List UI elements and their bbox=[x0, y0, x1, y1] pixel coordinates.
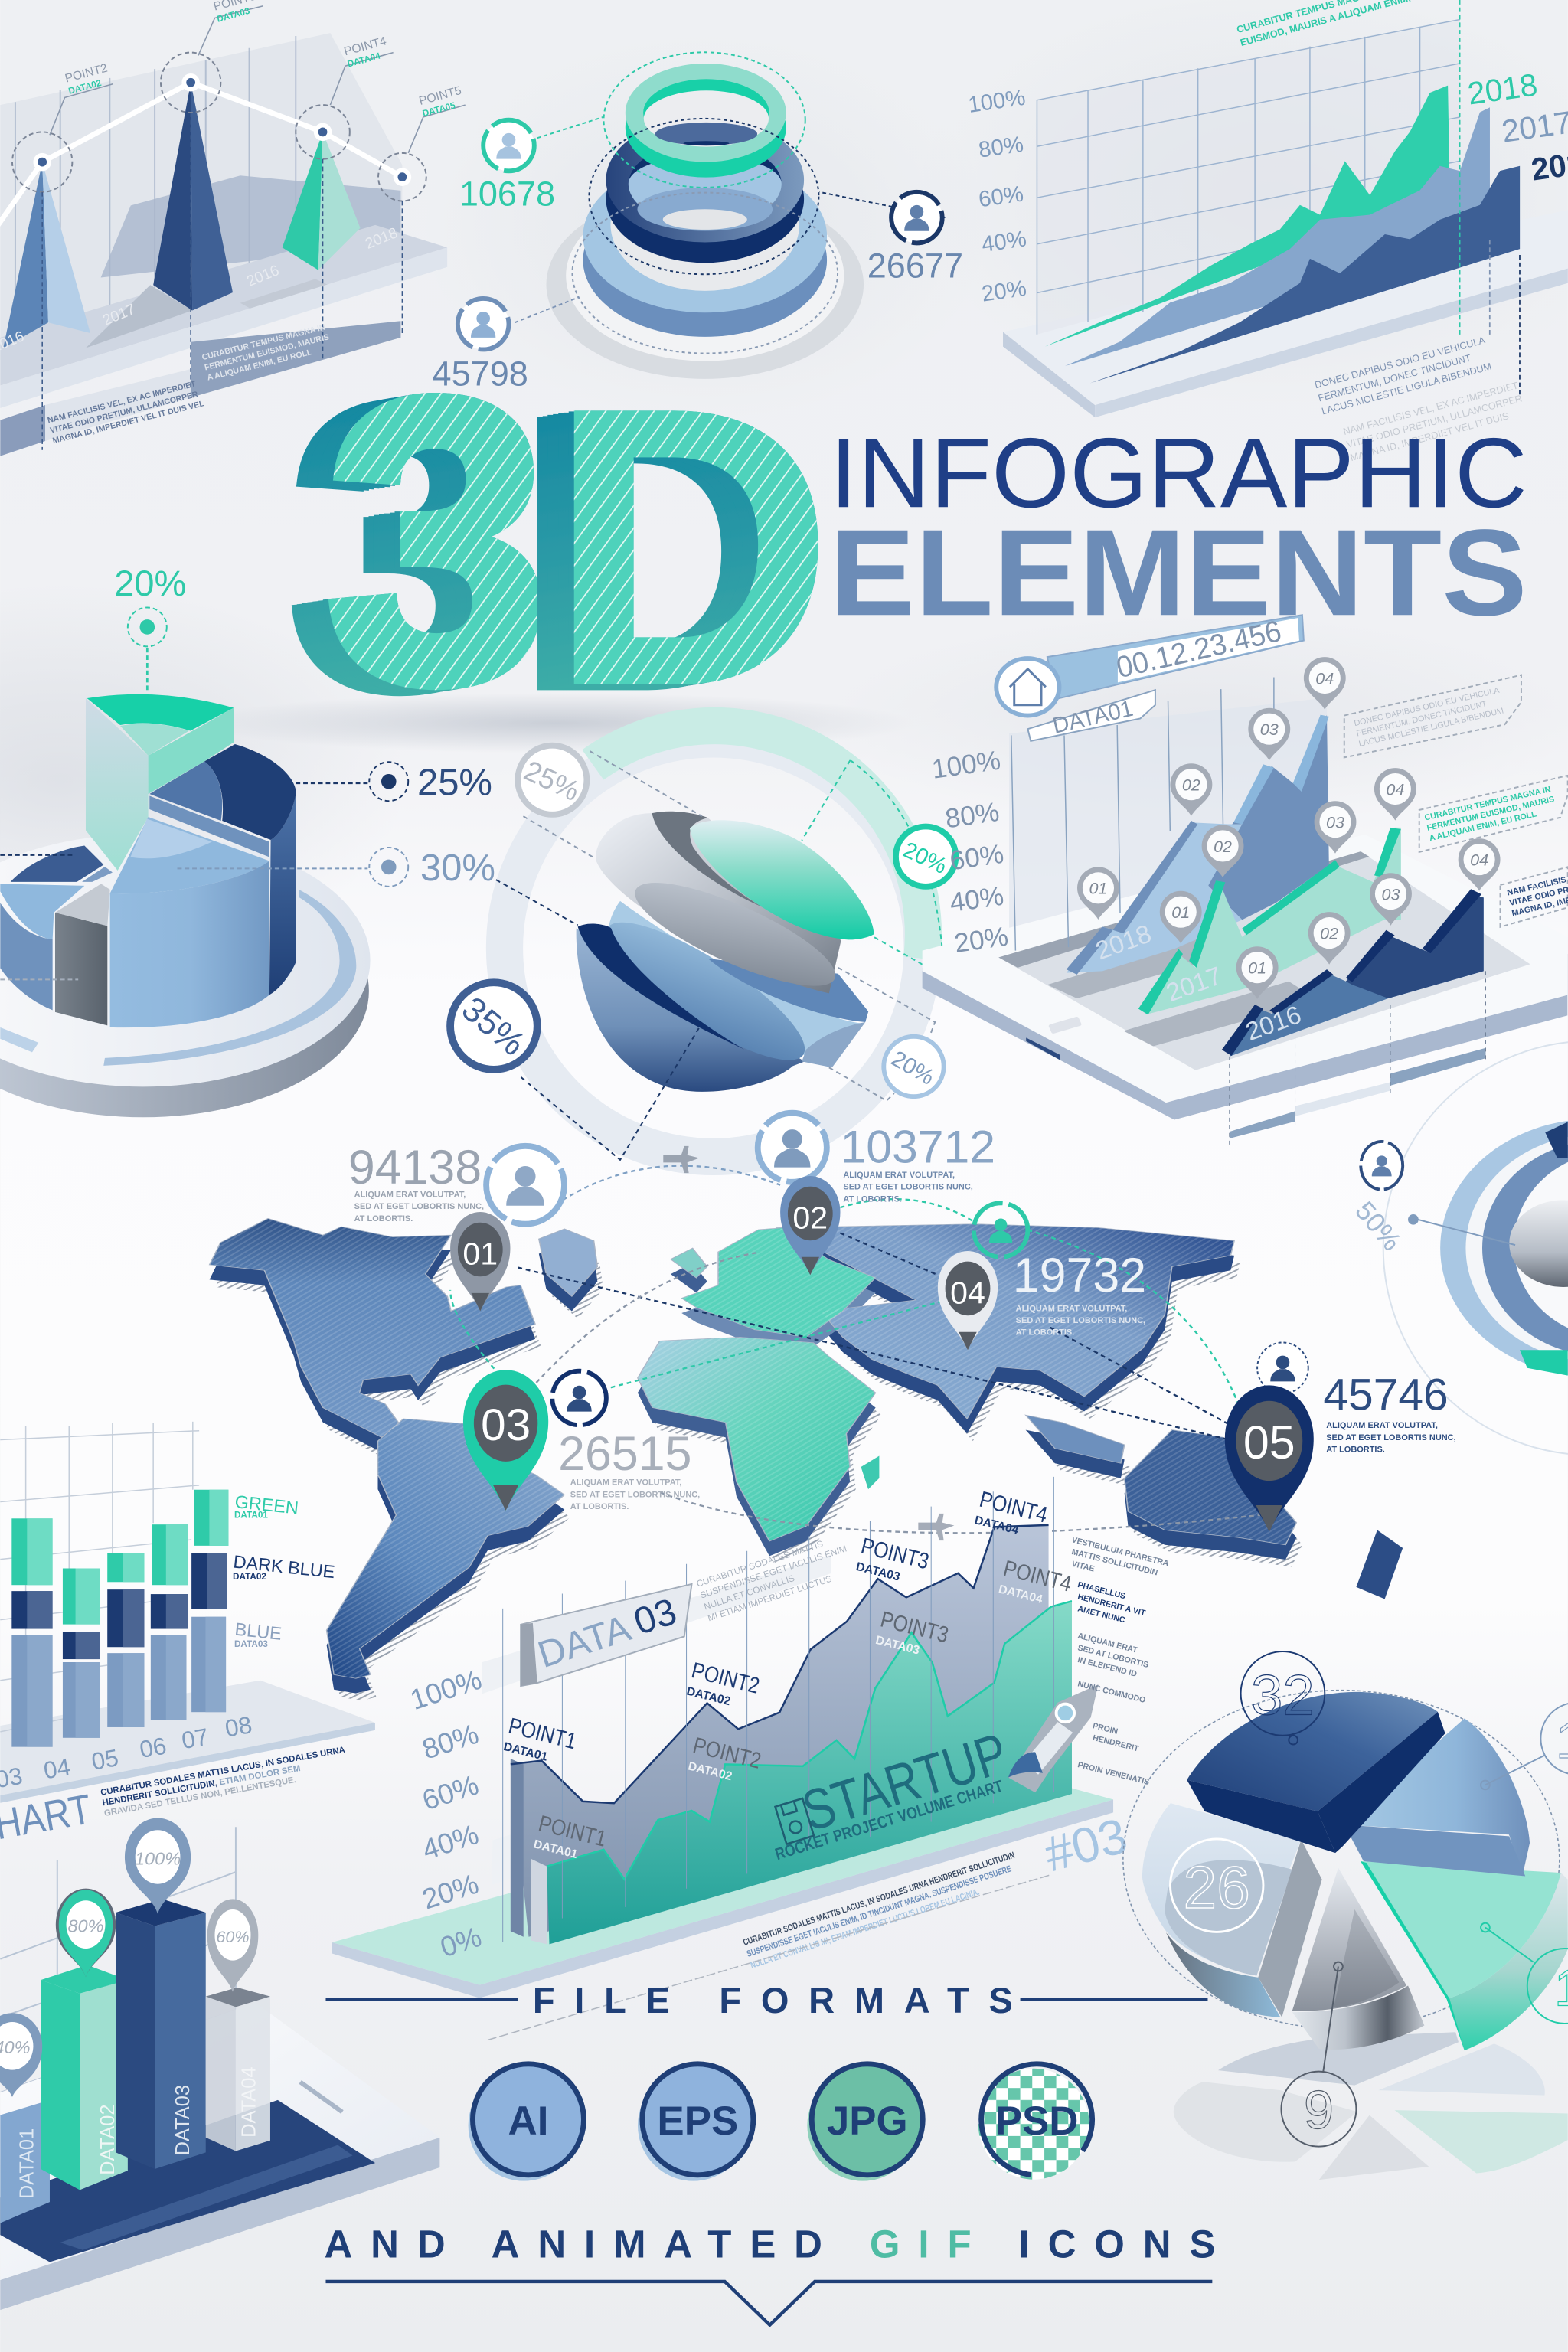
badge: blue 20%: 20% bbox=[887, 1046, 939, 1090]
axis labels: 40% bbox=[948, 881, 1005, 918]
segment: dark sliver bbox=[652, 812, 763, 907]
segment: blue disc bbox=[590, 901, 821, 1081]
badge: 9: 9 bbox=[1304, 2079, 1334, 2140]
caption grey: VITAE ODIO PRETIUM, ULLAMCORPER bbox=[1345, 392, 1524, 450]
icon: user teal bbox=[974, 1203, 1027, 1257]
side notes: ALIQUAM ERAT bbox=[1076, 1632, 1139, 1655]
note: teal: FERMENTUM EUISMOD, MAURIS bbox=[1426, 795, 1555, 833]
badge: PSD bbox=[972, 2055, 1101, 2184]
note: grey bbox=[1344, 675, 1521, 757]
series labels: grey: DATA01 bbox=[532, 1838, 579, 1861]
small text: A ALIQUAM ENIM, EU ROLL bbox=[206, 348, 313, 383]
badge: AI: AI bbox=[508, 2099, 548, 2144]
icon: floppy bbox=[776, 1798, 814, 1844]
small text: FERMENTUM EUISMOD, MAURIS bbox=[204, 332, 330, 372]
pins bbox=[1077, 657, 1501, 999]
small text: VITAE ODIO PRETIUM, ULLAMCORPER bbox=[49, 390, 199, 436]
stat: 19732 bbox=[1013, 1249, 1146, 1338]
map fine stripes bbox=[210, 1218, 1296, 1678]
badge: 35%: 35% bbox=[455, 989, 533, 1063]
side notes: AMET NUNC bbox=[1076, 1604, 1126, 1625]
pins: 04 bbox=[1470, 850, 1488, 869]
year labels: 2018 bbox=[1092, 920, 1155, 965]
note: teal: A ALIQUAM ENIM, EU ROLL bbox=[1429, 809, 1537, 843]
chart caption: CURABITUR SODALES MATTIS LACUS, IN SODALES URNA bbox=[100, 1746, 346, 1798]
badge: JPG: JPG bbox=[827, 2099, 908, 2144]
segment: glass bbox=[609, 901, 865, 1055]
side notes: PHASELLUS bbox=[1076, 1580, 1126, 1601]
series labels: navy bbox=[502, 1487, 1050, 1769]
percent axis: 60% bbox=[977, 181, 1025, 212]
chart title: STARTUP: STARTUP bbox=[795, 1721, 1014, 1843]
label: 25%: 25% bbox=[417, 762, 492, 803]
stat: 10678: 10678 bbox=[459, 174, 555, 213]
panel: bottom-right pie bbox=[1123, 1651, 1568, 2180]
segment: right lip bbox=[708, 959, 868, 1067]
year labels: 2017 bbox=[100, 301, 138, 329]
series 2017 bbox=[1138, 828, 1401, 1014]
icon: plane 1 bbox=[663, 1146, 699, 1173]
slice: light blue bbox=[1344, 1719, 1530, 1876]
new zealand bbox=[1356, 1530, 1403, 1599]
badge: 9 bbox=[1281, 1962, 1356, 2147]
stat: 45746: SED AT EGET LOBORTIS NUNC, bbox=[1326, 1433, 1456, 1442]
slice: teal bbox=[1361, 1861, 1568, 2050]
tag: DATA 03: 03 bbox=[629, 1591, 681, 1643]
panel: world map bbox=[210, 1113, 1456, 1700]
bar: DATA04 bbox=[206, 1988, 270, 2151]
note: navy: VITAE ODIO PR bbox=[1508, 885, 1568, 908]
panel: tablet chart bbox=[923, 615, 1568, 1148]
note text: MI ETIAM IMPERDIET LUCTUS bbox=[707, 1574, 833, 1623]
caption blue: FERMENTUM, DONEC TINCIDUNT bbox=[1317, 351, 1472, 403]
side notes: HENDRERIT A VIT bbox=[1076, 1592, 1147, 1618]
panel: top-left cone chart bbox=[0, 0, 466, 456]
series labels: navy: DATA03 bbox=[854, 1560, 902, 1584]
panel: stacked rings bbox=[433, 52, 963, 394]
series labels: grey bbox=[532, 1556, 1074, 1867]
caption: SUSPENDISSE EGET IACULIS ENIM, ID TINCIDUNT MAGNA. SUSPENDISSE POSUERE bbox=[746, 1864, 1013, 1959]
panel: sphere chart bbox=[450, 726, 956, 1160]
percent axis bbox=[966, 85, 1028, 307]
title: 3D bbox=[325, 317, 833, 766]
stat: 94138 bbox=[348, 1141, 564, 1224]
series labels: navy: POINT1 bbox=[506, 1713, 579, 1754]
pin 05 bbox=[1225, 1385, 1314, 1532]
axis labels: 80% bbox=[418, 1717, 482, 1766]
panel: right donut bbox=[1349, 1041, 1568, 1455]
caption: NULLA ET CONVALLIS MI, ETIAM IMPERDIET LUCTUS LOREM EU LACINIA. bbox=[750, 1886, 981, 1971]
segment: teal cap bbox=[690, 820, 874, 939]
year labels: 2018 bbox=[363, 224, 400, 253]
badge: right upper bbox=[1481, 1703, 1568, 1789]
label: 20%: 20% bbox=[114, 563, 186, 603]
callout rule bbox=[325, 2282, 1212, 2325]
badge: PSD: PSD bbox=[995, 2099, 1078, 2144]
stat: 94138: AT LOBORTIS. bbox=[354, 1214, 413, 1223]
note: teal: CURABITUR TEMPUS MAGNA IN bbox=[1424, 785, 1552, 823]
legend: BLUE bbox=[234, 1619, 283, 1644]
header pill bbox=[1047, 615, 1304, 699]
stat: 103712 bbox=[758, 1113, 995, 1204]
stat: 19732: 19732 bbox=[1013, 1249, 1146, 1302]
bar: DATA04: DATA04 bbox=[238, 2066, 260, 2138]
pins: 01 bbox=[1171, 903, 1190, 922]
axis labels: 40% bbox=[418, 1818, 482, 1866]
side notes: VESTIBULUM PHARETRA bbox=[1070, 1535, 1170, 1569]
pins: 02 bbox=[1182, 775, 1200, 794]
bar: DATA01: DATA01 bbox=[16, 2128, 38, 2199]
badge: 25%: 25% bbox=[519, 754, 585, 807]
point labels: DATA04 bbox=[346, 51, 382, 70]
series labels: grey: DATA04 bbox=[997, 1583, 1044, 1606]
side notes bbox=[1070, 1535, 1170, 1787]
axis labels bbox=[930, 746, 1010, 959]
bar: DATA02 bbox=[41, 1965, 128, 2190]
small text bbox=[47, 322, 332, 446]
badge: 26 bbox=[1170, 1839, 1263, 1932]
pin 03: 03 bbox=[481, 1400, 531, 1450]
chart number: #03 bbox=[1038, 1807, 1133, 1883]
pin: 100% bbox=[125, 1818, 191, 1914]
series labels: grey: DATA02 bbox=[687, 1760, 733, 1783]
pins: 04 bbox=[1386, 779, 1404, 799]
stat: 19732: AT LOBORTIS. bbox=[1016, 1328, 1074, 1338]
shadow under title bbox=[195, 693, 915, 753]
side notes: MATTIS SOLLICITUDIN bbox=[1070, 1547, 1158, 1578]
pin 01: 01 bbox=[462, 1236, 498, 1272]
tag DATA01: DATA01 bbox=[1050, 696, 1135, 739]
segment: grey band bbox=[596, 813, 841, 993]
badge: EPS bbox=[638, 2064, 753, 2181]
axis labels: 0% bbox=[436, 1920, 485, 1963]
side notes: IN ELEIFEND ID bbox=[1076, 1655, 1138, 1679]
axis numbers: 06 bbox=[138, 1733, 168, 1763]
stat: 45798 bbox=[433, 299, 528, 394]
axis numbers: 05 bbox=[90, 1744, 120, 1775]
series 2018 bbox=[1067, 715, 1329, 975]
legend: DATA02 bbox=[233, 1572, 266, 1582]
slice: grey bbox=[1292, 1868, 1424, 2050]
bar: DATA01 bbox=[0, 2100, 50, 2223]
year labels bbox=[1465, 60, 1568, 194]
axis labels: 60% bbox=[418, 1768, 482, 1816]
pin: 80%: 80% bbox=[67, 1916, 104, 1936]
axis labels: 100% bbox=[407, 1663, 485, 1716]
stat: 45798: 45798 bbox=[433, 354, 528, 394]
phone body bbox=[0, 2003, 439, 2310]
stat: 103712: 103712 bbox=[840, 1120, 995, 1172]
header pill: 00.12.23.456 bbox=[1113, 615, 1285, 684]
side notes: SED AT LOBORTIS bbox=[1076, 1643, 1149, 1670]
pins: 02 bbox=[1320, 923, 1338, 942]
bar: DATA03: DATA03 bbox=[172, 2085, 194, 2155]
ring: navy bbox=[606, 117, 804, 263]
slice: left blue bbox=[0, 845, 113, 1010]
label: 30% bbox=[369, 848, 495, 889]
series labels: navy: DATA01 bbox=[502, 1740, 549, 1764]
slice: pale bbox=[1142, 1803, 1322, 2017]
legend bbox=[232, 1491, 336, 1649]
caption grey: NAM FACILISIS VEL, EX AC IMPERDIET bbox=[1342, 379, 1520, 437]
tag DATA01 bbox=[1027, 690, 1155, 741]
legend: DATA03 bbox=[234, 1639, 268, 1649]
stat: 26515: ALIQUAM ERAT VOLUTPAT, bbox=[570, 1478, 681, 1488]
chart caption: HENDRERIT SOLLICITUDIN, ETIAM DOLOR SEM bbox=[102, 1764, 301, 1808]
caption grey: MAGNA ID, IMPERDIET VEL IT DUIS bbox=[1349, 410, 1510, 463]
small text: NAM FACILISIS VEL, EX AC IMPERDIET bbox=[47, 379, 198, 425]
icon: plane 2 bbox=[918, 1514, 954, 1540]
madagascar bbox=[861, 1456, 879, 1489]
stat: 45746 bbox=[1257, 1342, 1456, 1454]
icon: rocket bbox=[1008, 1684, 1098, 1792]
axis numbers bbox=[0, 1711, 254, 1793]
pin: 40% bbox=[0, 2013, 42, 2097]
pin: 80% bbox=[56, 1889, 116, 1977]
year labels bbox=[1092, 920, 1305, 1047]
segment: navy rim bbox=[578, 924, 744, 1050]
badge: AI bbox=[469, 2064, 583, 2181]
tag: DATA 03: DATA bbox=[533, 1608, 636, 1676]
point labels: DATA02 bbox=[67, 78, 103, 96]
map sides bbox=[210, 1233, 1296, 1694]
icon: house bbox=[996, 658, 1060, 716]
3 face: 3 bbox=[325, 317, 549, 766]
stat: 19732: SED AT EGET LOBORTIS NUNC, bbox=[1016, 1316, 1145, 1325]
series labels: navy: DATA02 bbox=[685, 1685, 732, 1708]
pins: 01 bbox=[1248, 959, 1266, 978]
year labels: 2016 bbox=[1242, 1001, 1305, 1047]
stat: 94138: SED AT EGET LOBORTIS NUNC, bbox=[354, 1202, 484, 1211]
axis labels: 20% bbox=[418, 1867, 482, 1916]
axis labels: 80% bbox=[943, 797, 1001, 834]
panel: phone bar chart bbox=[0, 1818, 439, 2310]
panel: left pie chart bbox=[0, 563, 495, 1117]
legend: DARK BLUE bbox=[232, 1551, 336, 1582]
title: INFOGRAPHIC: INFOGRAPHIC bbox=[830, 418, 1527, 528]
stat: 45746: AT LOBORTIS. bbox=[1326, 1445, 1385, 1454]
pin 04 bbox=[938, 1251, 998, 1350]
chart caption: GRAVIDA SED TELLUS NON, PELLENTESQUE. bbox=[103, 1775, 297, 1818]
title: ELEMENTS: ELEMENTS bbox=[830, 505, 1527, 642]
badge: teal 20%: 20% bbox=[900, 837, 951, 879]
note: teal bbox=[1419, 776, 1568, 852]
stat: 94138: ALIQUAM ERAT VOLUTPAT, bbox=[354, 1190, 466, 1199]
note text: SUSPENDISSE EGET IACULIS ENIM bbox=[699, 1544, 848, 1601]
point labels: DATA03 bbox=[216, 6, 251, 24]
pins: 04 bbox=[1315, 668, 1334, 688]
slice: navy bbox=[149, 744, 296, 995]
caption: CURABITUR SODALES MATTIS LACUS, IN SODALES URNA HENDRERIT SOLLICITUDIN bbox=[742, 1851, 1016, 1948]
cone: navy bbox=[153, 83, 233, 311]
side notes: VITAE bbox=[1070, 1560, 1096, 1574]
stat: 103712: SED AT EGET LOBORTIS NUNC, bbox=[843, 1183, 973, 1192]
series labels: grey: POINT1 bbox=[536, 1811, 609, 1852]
caption blue: LACUS MOLESTIE LIGULA BIBENDUM bbox=[1321, 361, 1493, 416]
point labels: POINT2 bbox=[64, 62, 109, 86]
series labels: grey: POINT2 bbox=[691, 1733, 763, 1774]
percent axis: 20% bbox=[980, 276, 1028, 307]
badge: right lower bbox=[1481, 1923, 1568, 2024]
legend: DATA01 bbox=[234, 1511, 268, 1521]
axis numbers: 07 bbox=[179, 1723, 211, 1754]
side notes: PROIN bbox=[1092, 1721, 1119, 1736]
stat: 45746: ALIQUAM ERAT VOLUTPAT, bbox=[1326, 1421, 1438, 1430]
axis labels: 100% bbox=[930, 746, 1002, 785]
axis labels bbox=[407, 1663, 485, 1963]
note: grey: FERMENTUM, DONEC TINCIDUNT bbox=[1356, 700, 1488, 739]
year labels: 2017 bbox=[1163, 962, 1226, 1008]
stat: 26515: AT LOBORTIS. bbox=[570, 1502, 629, 1511]
badge: JPG bbox=[807, 2064, 923, 2181]
percent axis: 100% bbox=[966, 85, 1027, 118]
small text: MAGNA ID, IMPERDIET VEL IT DUIS VEL bbox=[51, 399, 206, 446]
note text: CURABITUR SODALES MATTIS bbox=[695, 1539, 825, 1589]
side notes: PROIN VENENATIS bbox=[1076, 1760, 1150, 1787]
series labels: navy: POINT3 bbox=[858, 1534, 932, 1574]
series labels: grey: DATA03 bbox=[874, 1634, 921, 1658]
stat: 26515 bbox=[552, 1371, 700, 1511]
percent axis: 80% bbox=[977, 132, 1025, 163]
note: navy: NAM FACILISIS bbox=[1506, 875, 1567, 898]
pin: 60% bbox=[207, 1899, 258, 1992]
stat: 94138: 94138 bbox=[348, 1141, 482, 1194]
sphere connectors bbox=[496, 751, 944, 1160]
slice: teal bbox=[86, 694, 234, 871]
small text: CURABITUR TEMPUS MAGNA IN bbox=[201, 322, 326, 362]
pin 03 bbox=[463, 1370, 548, 1511]
pin 05: 05 bbox=[1243, 1416, 1295, 1468]
axis numbers: 04 bbox=[41, 1753, 73, 1784]
point labels: POINT5 bbox=[418, 84, 463, 108]
pins: 03 bbox=[1260, 720, 1279, 739]
connector lines bbox=[450, 1166, 1260, 1533]
soft background shading bbox=[0, 0, 1568, 975]
label: 20% bbox=[114, 563, 186, 646]
side notes: NUNC COMMODO bbox=[1076, 1679, 1146, 1705]
stat: 26677: 26677 bbox=[867, 246, 963, 285]
badge: blue 20% bbox=[884, 1037, 944, 1096]
pin: 60%: 60% bbox=[216, 1927, 250, 1946]
stat: 103712: AT LOBORTIS. bbox=[843, 1194, 902, 1204]
bar: DATA02: DATA02 bbox=[97, 2104, 119, 2175]
series labels: navy: DATA04 bbox=[973, 1514, 1020, 1537]
side notes: HENDRERIT bbox=[1092, 1733, 1140, 1754]
cone: blue bbox=[3, 162, 90, 348]
slice: navy bbox=[1187, 1692, 1446, 1853]
note: grey: LACUS MOLESTIE LIGULA BIBENDUM bbox=[1358, 707, 1504, 749]
axis numbers: 08 bbox=[223, 1711, 254, 1743]
slice: grey bbox=[55, 884, 110, 1025]
heading: FILE FORMATS: FILE FORMATS bbox=[533, 1980, 1013, 2020]
badge: teal 20% bbox=[896, 827, 956, 887]
series labels: navy: POINT4 bbox=[977, 1487, 1050, 1528]
caption blue bbox=[1313, 334, 1494, 416]
note: grey: DONEC DAPIBUS ODIO EU VEHICULA bbox=[1353, 686, 1501, 728]
pin 01 bbox=[450, 1212, 510, 1311]
badge: 32: 32 bbox=[1251, 1663, 1315, 1726]
stat: 26677 bbox=[867, 192, 963, 285]
label: 25% bbox=[369, 762, 492, 803]
note: navy bbox=[1501, 867, 1568, 927]
badge: EPS: EPS bbox=[657, 2099, 738, 2144]
note text: NULLA ET CONVALLIS bbox=[703, 1573, 796, 1612]
ring: teal bbox=[626, 64, 786, 178]
pin 04: 04 bbox=[950, 1276, 985, 1311]
pin 02: 02 bbox=[792, 1200, 828, 1236]
badge: 26: 26 bbox=[1184, 1854, 1250, 1921]
map hatching bbox=[215, 1240, 1302, 1700]
tag: DATA 03 bbox=[521, 1584, 692, 1686]
year labels bbox=[0, 224, 400, 356]
segment: bowl bbox=[577, 928, 805, 1092]
series labels: navy: POINT2 bbox=[689, 1658, 762, 1699]
chart subtitle: ROCKET PROJECT VOLUME CHART bbox=[773, 1776, 1005, 1864]
caption grey bbox=[1342, 379, 1527, 463]
map surface bbox=[210, 1218, 1296, 1678]
axis labels: 20% bbox=[952, 922, 1010, 959]
pins: 03 bbox=[1382, 885, 1400, 904]
year labels: 2018 bbox=[1465, 67, 1540, 112]
pins: 03 bbox=[1326, 812, 1344, 831]
D face: D bbox=[549, 326, 833, 766]
pins: 02 bbox=[1214, 837, 1232, 856]
panel: stacked bar chart bbox=[0, 1422, 375, 1853]
legend: GREEN bbox=[234, 1491, 299, 1518]
point labels: POINT4 bbox=[343, 34, 388, 58]
stat: 26515: 26515 bbox=[558, 1427, 691, 1481]
series labels: grey: POINT3 bbox=[878, 1607, 951, 1648]
label: 50%: 50% bbox=[1349, 1196, 1406, 1256]
caption blue: DONEC DAPIBUS ODIO EU VEHICULA bbox=[1313, 334, 1487, 390]
pin 02 bbox=[780, 1176, 840, 1275]
axis labels: 60% bbox=[948, 839, 1005, 876]
series labels: grey: POINT4 bbox=[1001, 1556, 1074, 1597]
pin: 100%: 100% bbox=[135, 1848, 181, 1868]
label: 30%: 30% bbox=[420, 848, 495, 889]
note text bbox=[695, 1532, 855, 1623]
stat: 45746: 45746 bbox=[1323, 1370, 1449, 1420]
heading: AND ANIMATED GIF ICONS: AND ANIMATED GIF ICONS bbox=[325, 2223, 1233, 2266]
pins: 01 bbox=[1089, 879, 1107, 898]
bars bbox=[11, 1490, 228, 1747]
icon: user bbox=[1361, 1142, 1403, 1190]
badge: 32 bbox=[1241, 1651, 1325, 1745]
point labels bbox=[64, 0, 466, 119]
3 extrude: 3 bbox=[325, 317, 549, 766]
series 2016 bbox=[1222, 889, 1484, 1057]
D extrude: D bbox=[549, 326, 833, 766]
panel: startup chart bbox=[332, 1477, 1170, 2040]
year labels: 2016 bbox=[244, 262, 282, 290]
pie shadows bbox=[1174, 2032, 1568, 2180]
outer ring bbox=[505, 726, 923, 1157]
stat: 103712: ALIQUAM ERAT VOLUTPAT, bbox=[843, 1171, 955, 1180]
point labels: DATA05 bbox=[421, 100, 457, 119]
stat: 10678 bbox=[459, 120, 555, 213]
ring: blue bbox=[583, 158, 827, 337]
line series bbox=[0, 53, 426, 233]
bar: DATA03 bbox=[116, 1899, 206, 2169]
stat: 26515: SED AT EGET LOBORTIS NUNC, bbox=[570, 1490, 700, 1499]
panel: top-right area chart bbox=[966, 0, 1568, 463]
slice: blue bbox=[110, 817, 270, 1027]
percent axis: 40% bbox=[980, 226, 1028, 257]
cone: teal bbox=[283, 132, 361, 270]
stat: 19732: ALIQUAM ERAT VOLUTPAT, bbox=[1016, 1304, 1127, 1313]
